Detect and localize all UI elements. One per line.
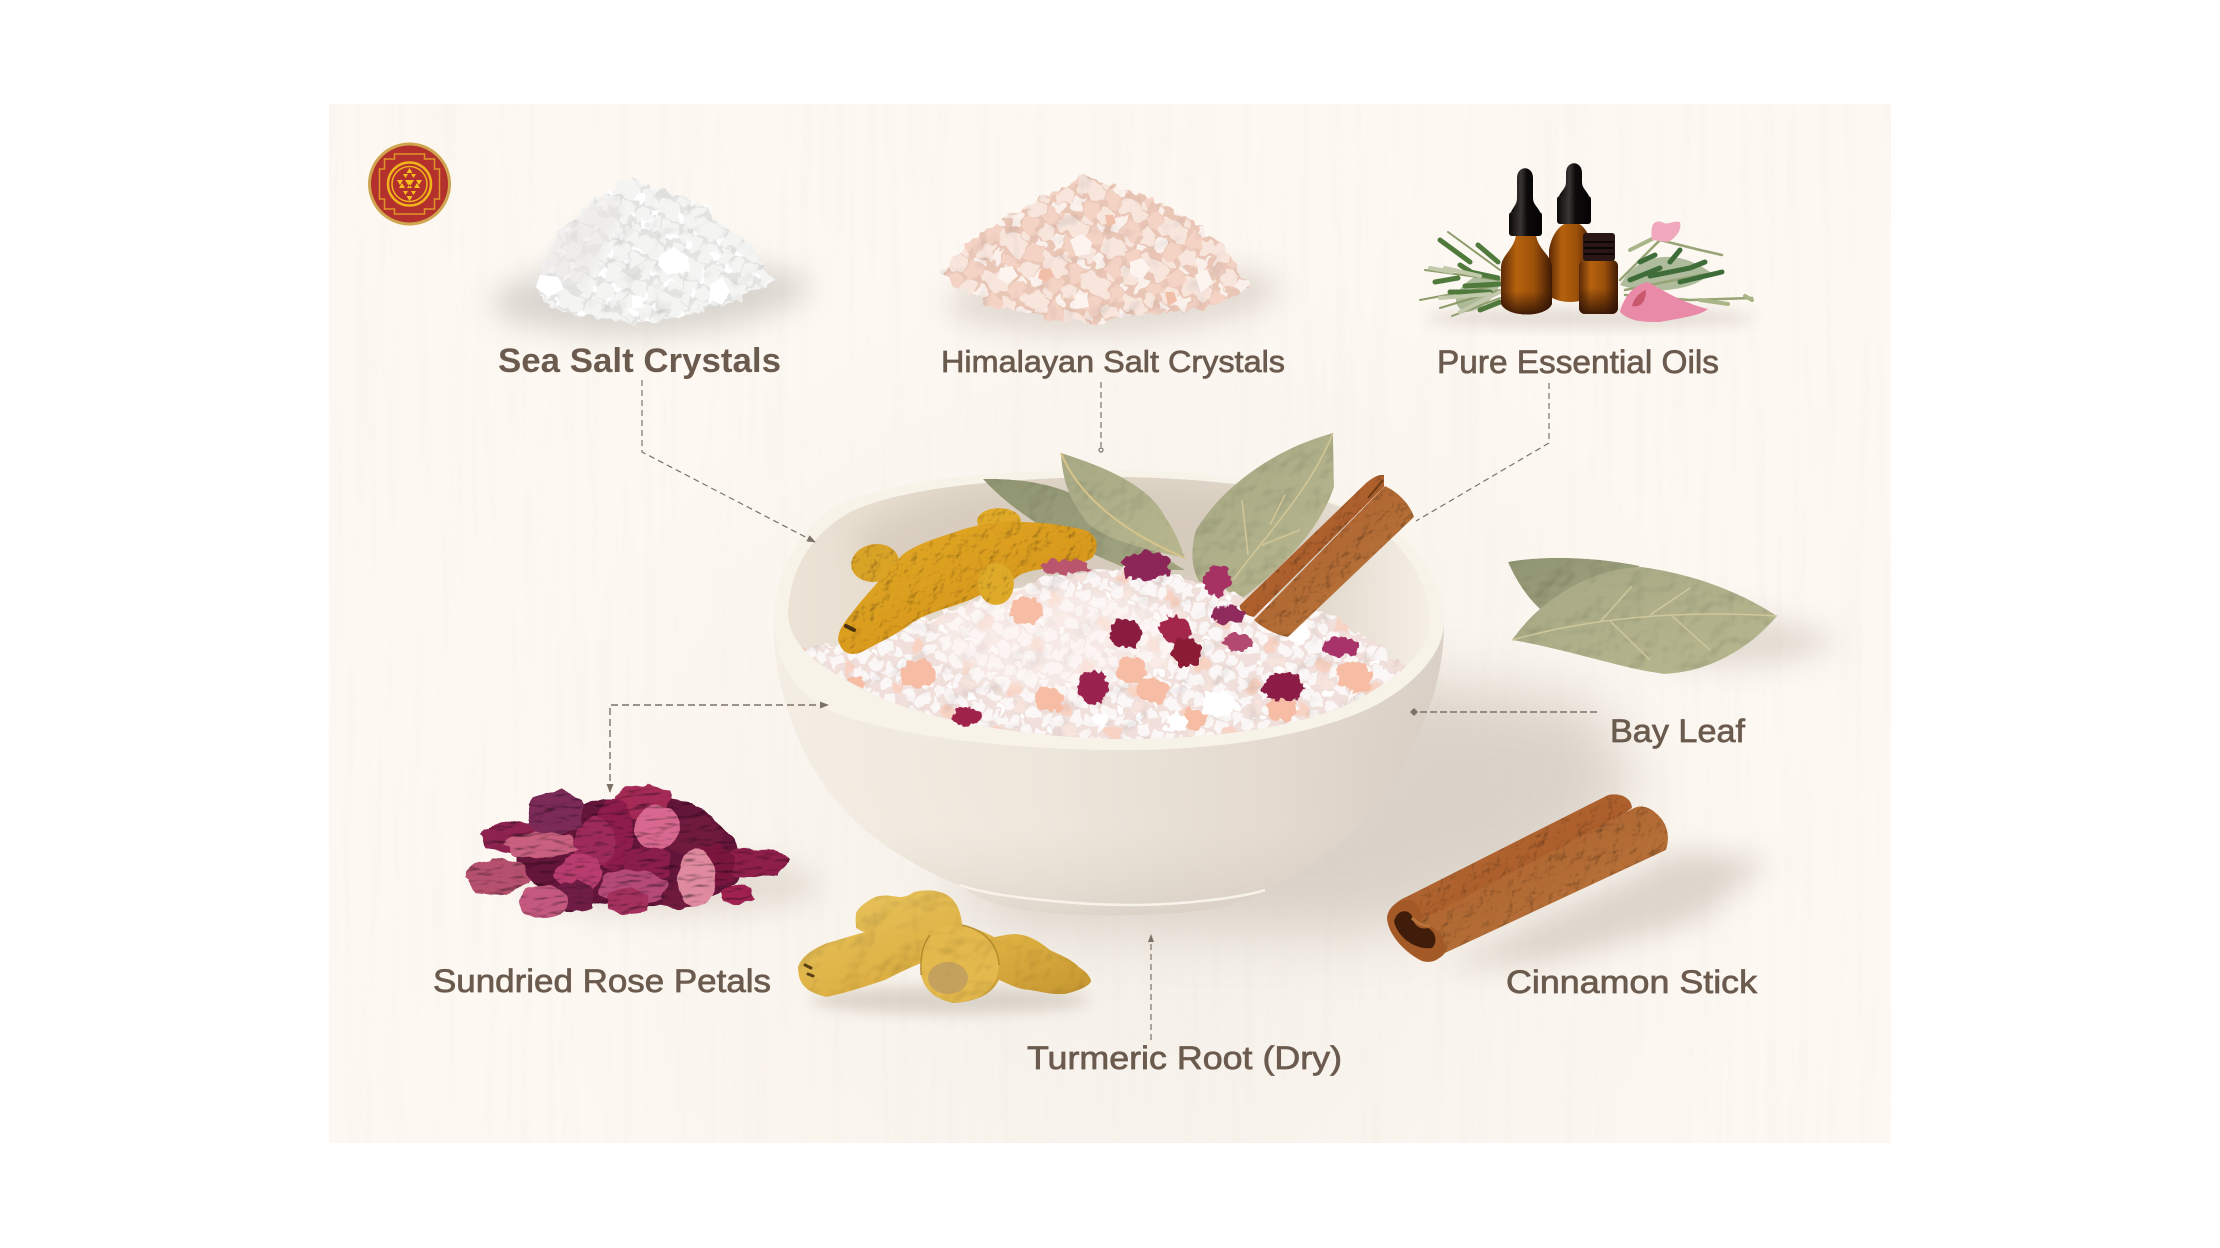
- ingredient: himalayan salt pile: [940, 176, 1281, 335]
- small amber bottle: [1579, 233, 1618, 314]
- ingredient: cinnamon stick: [1387, 794, 1770, 970]
- label: Sundried Rose Petals: Sundried Rose Petals: [433, 963, 771, 999]
- bowl body: [774, 620, 1444, 915]
- back bay leaves: [983, 433, 1334, 600]
- right herb sprigs: [1620, 235, 1752, 304]
- ingredient: bay leaf: [1508, 558, 1840, 674]
- arrow: rose petals to bowl: [610, 705, 828, 792]
- infographic canvas: [329, 104, 1891, 1143]
- turmeric in bowl: [838, 508, 1097, 654]
- arrow: sea salt to bowl: [642, 380, 815, 542]
- bowl interior: [788, 477, 1430, 739]
- label: Pure Essential Oils: Pure Essential Oils: [1437, 344, 1719, 380]
- ingredient: mixing bowl with salt: [774, 433, 1444, 915]
- shadow: bowl cast shadow: [940, 680, 1640, 935]
- ingredient: turmeric root: [798, 890, 1091, 1014]
- label: Himalayan Salt Crystals: Himalayan Salt Crystals: [941, 344, 1285, 379]
- left herb sprigs: [1420, 232, 1500, 316]
- rose petals in bowl: [951, 548, 1362, 729]
- ingredient: essential oil bottles with herbs: [1420, 163, 1755, 328]
- logo: sri yantra emblem: [370, 144, 450, 224]
- arrow: bay leaf to bowl: [1410, 708, 1597, 716]
- salt mound: [802, 566, 1406, 739]
- arrow: essential oils to bowl: [1416, 383, 1549, 521]
- cinnamon in bowl: [1240, 475, 1414, 637]
- ingredient: sundried rose petals: [458, 783, 820, 923]
- interior wall shading: [860, 495, 1332, 586]
- arrow: himalayan salt to bowl: [1099, 382, 1103, 452]
- label: Sea Salt Crystals: Sea Salt Crystals: [498, 342, 781, 380]
- label: Bay Leaf: Bay Leaf: [1610, 713, 1745, 749]
- label: Cinnamon Stick: Cinnamon Stick: [1506, 964, 1758, 1000]
- bowl rim: [774, 470, 1444, 750]
- panel: textured background: [329, 104, 1891, 1143]
- pink rose bud: [1651, 222, 1680, 242]
- ingredient: sea salt pile: [490, 178, 811, 335]
- front dropper bottle: [1501, 168, 1552, 314]
- pink rose petal: [1620, 282, 1708, 322]
- bowl foot ridge: [960, 885, 1265, 905]
- arrow: turmeric to bowl: [1148, 934, 1154, 1040]
- back dropper bottle: [1549, 163, 1592, 302]
- label: Turmeric Root (Dry): Turmeric Root (Dry): [1027, 1040, 1342, 1076]
